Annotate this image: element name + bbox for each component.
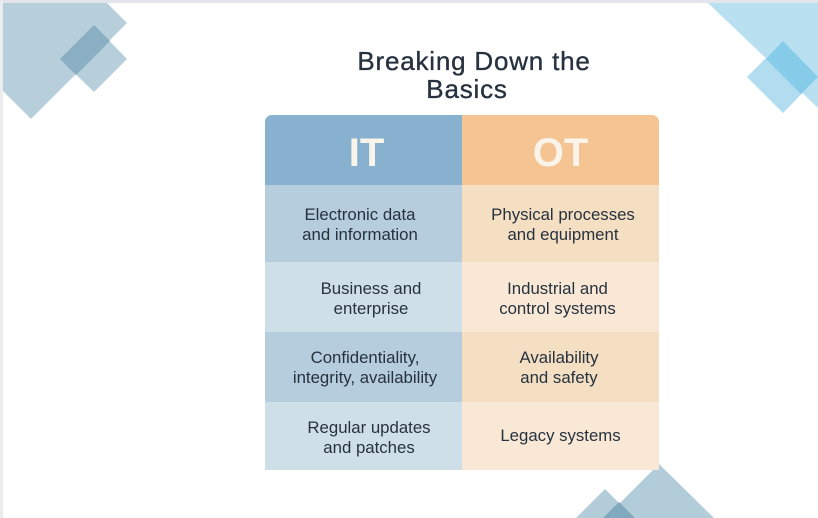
comparison table bbox=[265, 115, 659, 470]
row 1: IT: and information bbox=[302, 224, 418, 244]
row 4: IT bbox=[265, 402, 462, 470]
row 2: OT: control systems bbox=[499, 298, 616, 318]
row 2: OT bbox=[462, 262, 659, 332]
title: Basics bbox=[426, 74, 508, 104]
row 2: IT: Business and bbox=[321, 278, 421, 298]
header: IT bbox=[265, 115, 462, 185]
row 1: OT: and equipment bbox=[507, 224, 618, 244]
page frame: left edge bbox=[0, 0, 3, 518]
row 2: IT bbox=[265, 262, 462, 332]
row 3: IT: Confidentiality, bbox=[311, 348, 419, 366]
row 3: OT: and safety bbox=[520, 368, 598, 386]
row 3: OT: Availability bbox=[520, 348, 598, 366]
row 1: IT bbox=[265, 185, 462, 262]
row 4: IT: and patches bbox=[323, 438, 415, 457]
title: Breaking Down the bbox=[357, 46, 591, 76]
row 3: IT: integrity, availability bbox=[293, 368, 437, 386]
row 2: IT: enterprise bbox=[334, 298, 408, 318]
header: OT: OT bbox=[533, 131, 588, 175]
row 4: OT: Legacy systems bbox=[500, 426, 621, 444]
header: IT: IT bbox=[349, 131, 384, 175]
row 4: IT: Regular updates bbox=[307, 418, 431, 437]
page frame: top edge bbox=[0, 0, 818, 3]
row 3: IT bbox=[265, 332, 462, 402]
header: OT bbox=[462, 115, 659, 185]
row 1: IT: Electronic data bbox=[304, 204, 416, 224]
row 1: OT: Physical processes bbox=[491, 204, 635, 224]
row 4: OT bbox=[462, 402, 659, 470]
row 1: OT bbox=[462, 185, 659, 262]
title bbox=[357, 46, 591, 104]
row 2: OT: Industrial and bbox=[507, 278, 608, 298]
row 3: OT bbox=[462, 332, 659, 402]
